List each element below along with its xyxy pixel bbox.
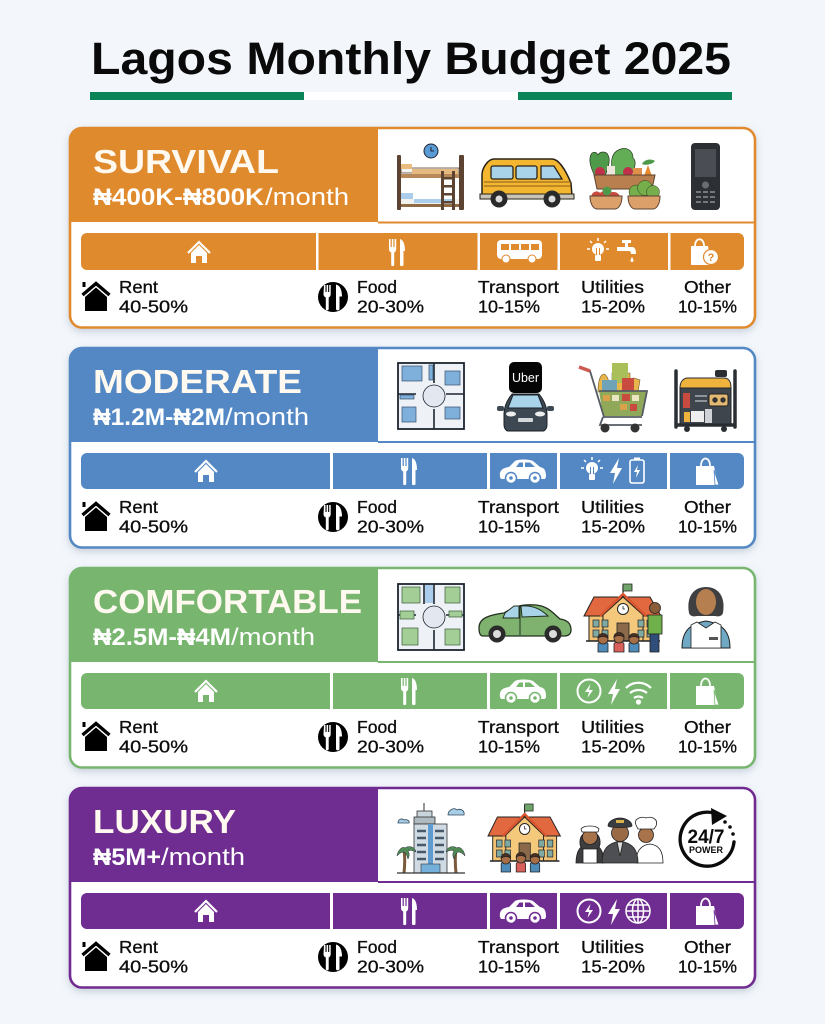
panel: comfortable xyxy=(70,568,755,768)
category bar: ? xyxy=(708,252,715,264)
budget shares: Other xyxy=(684,937,731,957)
icon: produce baskets xyxy=(590,148,660,209)
tier header xyxy=(70,128,755,222)
icon: 24/7 power: POWER xyxy=(689,845,723,855)
icon: shopping cart xyxy=(579,363,647,432)
icon: school xyxy=(488,804,560,872)
budget shares: 15-20% xyxy=(581,736,645,756)
budget shares: 15-20% xyxy=(581,296,645,316)
budget shares xyxy=(82,937,737,976)
icon: generator xyxy=(676,370,735,432)
tier header xyxy=(70,568,755,662)
icon: green sedan xyxy=(479,605,571,642)
budget shares: Rent xyxy=(119,497,158,517)
budget shares: 10-15% xyxy=(478,956,540,976)
budget shares xyxy=(82,497,737,536)
budget shares: Other xyxy=(684,497,731,517)
panel: survival xyxy=(70,128,755,328)
tier header: LUXURY xyxy=(93,803,236,840)
title: Lagos Monthly Budget 2025 xyxy=(91,33,731,84)
budget shares: Food xyxy=(357,937,397,957)
icon: high-rise with palms xyxy=(397,803,465,873)
tier header: ₦1.2M-₦2M xyxy=(93,404,225,431)
category bar xyxy=(81,453,744,489)
icon: 24/7 power xyxy=(680,808,735,866)
tier header: SURVIVAL xyxy=(93,143,279,180)
budget shares: 15-20% xyxy=(581,516,645,536)
panel: moderate xyxy=(70,348,755,548)
budget shares: Utilities xyxy=(581,497,644,517)
tier header: /month xyxy=(231,624,315,651)
tier header: /month xyxy=(265,184,349,211)
budget shares: Utilities xyxy=(581,937,644,957)
tier header xyxy=(70,348,755,442)
card frame xyxy=(70,128,755,328)
panel: luxury xyxy=(70,788,755,988)
budget shares: Utilities xyxy=(581,277,644,297)
budget shares: 40-50% xyxy=(119,516,188,536)
category bar xyxy=(81,233,744,270)
budget shares: 10-15% xyxy=(478,736,540,756)
icon: school and teacher xyxy=(584,584,662,652)
budget shares: 40-50% xyxy=(119,956,188,976)
tier header: MODERATE xyxy=(93,363,302,400)
budget shares: Food xyxy=(357,497,397,517)
budget shares: 10-15% xyxy=(478,516,540,536)
category bar xyxy=(81,893,744,929)
icon: feature phone xyxy=(691,143,720,210)
budget shares: 10-15% xyxy=(678,516,737,536)
card frame xyxy=(70,568,755,768)
tier header: COMFORTABLE xyxy=(93,583,362,620)
icon: uber car: Uber xyxy=(512,371,539,385)
budget shares: 20-30% xyxy=(357,736,424,756)
budget shares: Utilities xyxy=(581,717,644,737)
icon: apartment floor plan xyxy=(398,363,464,429)
budget shares: Transport xyxy=(478,497,559,517)
budget shares: 40-50% xyxy=(119,296,188,316)
budget shares: Transport xyxy=(478,937,559,957)
budget shares: 20-30% xyxy=(357,516,424,536)
tier header: ₦400K-₦800K xyxy=(93,184,265,211)
icon: large apartment floor plan xyxy=(398,584,464,650)
budget shares: 20-30% xyxy=(357,296,424,316)
budget shares: Other xyxy=(684,277,731,297)
budget shares: 10-15% xyxy=(678,296,737,316)
card frame xyxy=(70,348,755,548)
icon: uber car xyxy=(497,362,554,431)
budget shares: 20-30% xyxy=(357,956,424,976)
budget shares xyxy=(82,277,737,316)
tier header: ₦5M+ xyxy=(93,844,161,871)
budget shares: Other xyxy=(684,717,731,737)
tier header: ₦2.5M-₦4M xyxy=(93,624,231,651)
budget shares: 10-15% xyxy=(478,296,540,316)
icon: yellow minibus xyxy=(480,159,574,208)
budget shares: Rent xyxy=(119,717,158,737)
budget shares xyxy=(82,717,737,756)
budget shares: Rent xyxy=(119,277,158,297)
budget shares: 10-15% xyxy=(678,956,737,976)
icon: bunk bed xyxy=(397,144,464,210)
tier header xyxy=(70,788,755,882)
icon: 24/7 power: 24/7 xyxy=(688,827,724,848)
icon: housekeeper xyxy=(682,587,730,648)
budget shares: Food xyxy=(357,717,397,737)
budget shares: Transport xyxy=(478,717,559,737)
budget shares: Transport xyxy=(478,277,559,297)
budget shares: 10-15% xyxy=(678,736,737,756)
card frame xyxy=(70,788,755,988)
icon: household staff xyxy=(576,817,663,863)
tier header: /month xyxy=(161,844,245,871)
budget shares: Food xyxy=(357,277,397,297)
tier header: /month xyxy=(225,404,309,431)
budget shares: Rent xyxy=(119,937,158,957)
budget shares: 15-20% xyxy=(581,956,645,976)
budget shares: 40-50% xyxy=(119,736,188,756)
category bar xyxy=(81,673,744,709)
